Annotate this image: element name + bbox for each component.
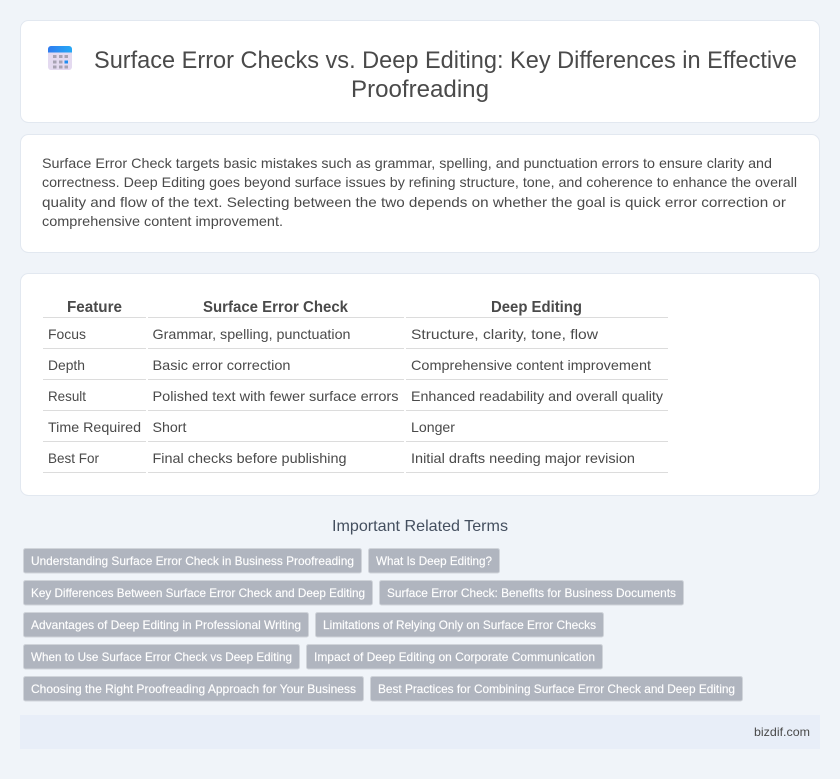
panel: summary paragraph [20,134,820,252]
row: best for: Best For [48,450,99,466]
chip [24,612,308,637]
row: time required [48,419,455,435]
table header: Surface Error Check [203,299,348,316]
footer bar [20,715,820,749]
panel: related term chips [24,548,742,701]
table header: Deep Editing [491,299,582,316]
row: time required: Longer [411,419,455,435]
row: result: Enhanced readability and overall quality [411,388,663,404]
row: best for: Initial drafts needing major revision [411,450,635,466]
chip: Best Practices for Combining Surface Error Check and Deep Editing [378,682,735,696]
chip: Key Differences Between Surface Error Check and Deep Editing [31,586,365,600]
chip [24,644,300,669]
chip: Surface Error Check: Benefits for Business Documents [387,586,676,600]
chip [380,580,684,605]
row: time required: Time Required [48,419,141,435]
title: Surface Error Checks vs. Deep Editing: Key Differences in Effective [94,47,797,74]
panel: summary paragraph: comprehensive content improvement. [42,213,283,229]
table header: Feature [67,299,122,316]
chip: Limitations of Relying Only on Surface Error Checks [323,618,596,632]
row: focus: Focus [48,326,86,342]
chip: What Is Deep Editing? [376,554,492,568]
chip [370,676,742,701]
chip [316,612,604,637]
row: time required: Short [152,419,187,435]
row: best for: Final checks before publishing [152,450,346,466]
panel: title card [20,20,820,122]
row: depth: Basic error correction [152,357,290,373]
chip [306,644,602,669]
panel: summary paragraph: quality and flow of the text. Selecting between the two depends on whether the goal is quick error correction or [42,194,786,210]
icon: calendar [48,46,72,70]
panel: comparison table [20,274,820,496]
row: result: Polished text with fewer surface errors [152,388,398,404]
chip: Impact of Deep Editing on Corporate Communication [314,650,595,664]
chip: When to Use Surface Error Check vs Deep Editing [31,650,292,664]
title [94,47,797,103]
row: focus [48,326,599,342]
footer bar: bizdif.com [754,725,810,739]
chip: Understanding Surface Error Check in Business Proofreading [31,554,354,568]
chip [24,548,362,573]
heading: important related terms: Important Related Terms [332,518,508,535]
chip [368,548,500,573]
title: Proofreading [351,76,489,103]
row: depth: Comprehensive content improvement [411,357,651,373]
table header [67,299,582,316]
row: focus: Grammar, spelling, punctuation [152,326,350,342]
row: best for [48,450,635,466]
row: result [48,388,663,404]
row: focus: Structure, clarity, tone, flow [411,326,599,342]
row: depth [48,357,651,373]
chip [24,676,364,701]
row: result: Result [48,388,86,404]
chip: Choosing the Right Proofreading Approach for Your Business [31,682,356,696]
panel: summary paragraph: correctness. Deep Editing goes beyond surface issues by refining structure, tone, and coherence to enhance the overall [42,174,797,190]
chip: Advantages of Deep Editing in Professional Writing [31,618,301,632]
row: depth: Depth [48,357,85,373]
chip [24,580,372,605]
panel: summary paragraph: Surface Error Check targets basic mistakes such as grammar, spelling, and punctuation errors to ensure clarity and [42,155,772,171]
